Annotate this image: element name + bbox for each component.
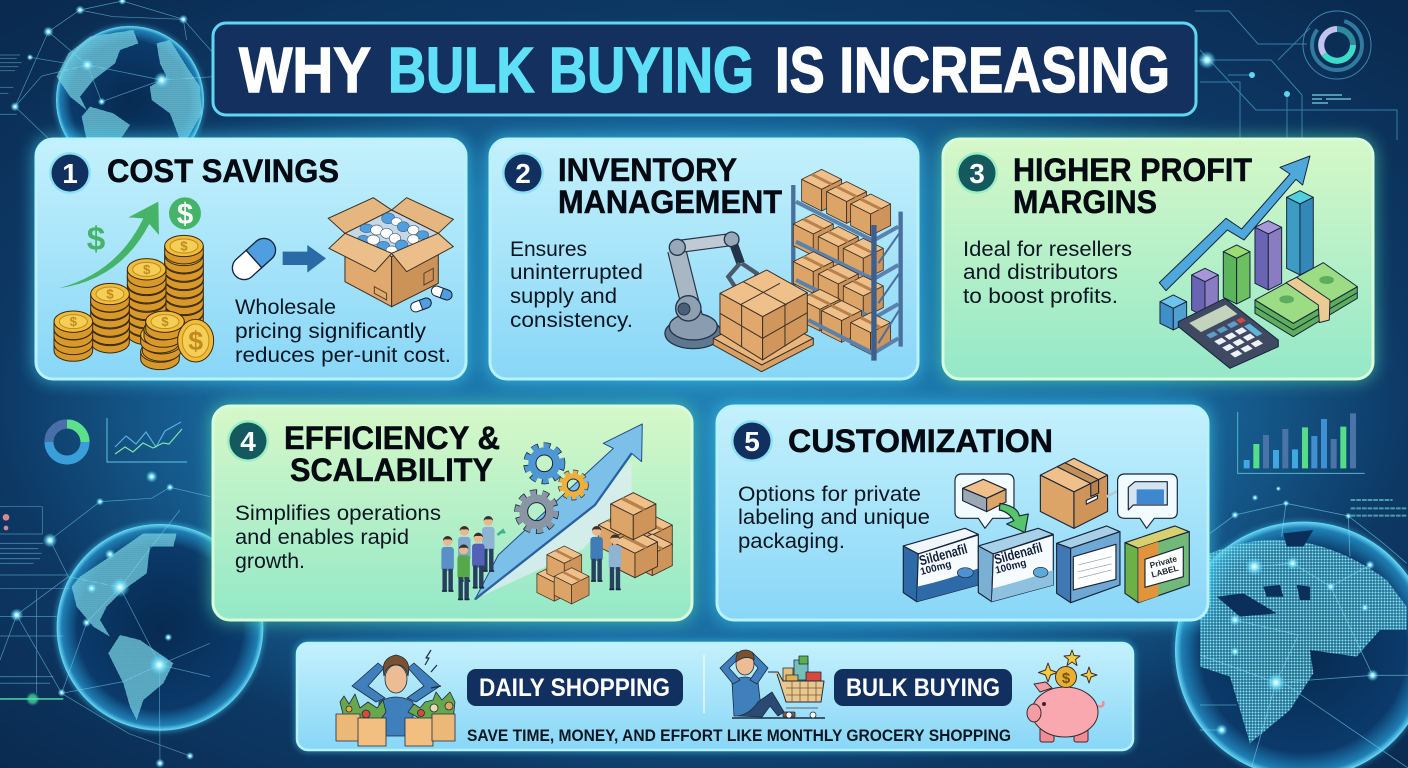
badge 3: 3 (969, 158, 985, 189)
illustration: coin stacks and growth arrow: $ (106, 287, 114, 302)
illustration: coin stacks and growth arrow: $ (188, 326, 203, 356)
icon: sildenafil box (903, 528, 978, 602)
icon: calculator (1178, 298, 1278, 368)
chart: rising bars, arrow, calculator, cash (1159, 156, 1357, 368)
heading: efficiency and scalability (284, 420, 500, 488)
label: daily shopping (467, 669, 683, 706)
heading: efficiency and scalability: SCALABILITY (290, 452, 493, 488)
icon: private label box: LABEL (1150, 563, 1180, 580)
icon: cash bundle (1255, 263, 1357, 337)
body text: customization: labeling and unique (738, 506, 930, 529)
body text: efficiency and scalability: growth. (235, 550, 305, 573)
badge 3 (956, 152, 998, 194)
heading: efficiency and scalability: EFFICIENCY & (284, 420, 500, 456)
body text: inventory management: consistency. (510, 309, 633, 332)
panel 3: higher profit margins (940, 136, 1376, 382)
body text: customization (738, 483, 930, 553)
badge 4: 4 (240, 426, 256, 457)
icon: shipping carton (1040, 458, 1108, 528)
label: bulk buying: BULK BUYING (846, 674, 1000, 702)
icon: sildenafil box: Sildenafil (917, 540, 969, 569)
background globe: bottom left (0, 471, 265, 768)
badge 4 (227, 420, 269, 462)
icon: sildenafil light box: Sildenafil (992, 539, 1044, 567)
background globe: bottom right (1174, 486, 1408, 768)
illustration: coin stacks and growth arrow: $ (70, 314, 78, 329)
badge 5 (731, 420, 773, 462)
body text: customization: Options for private (738, 483, 921, 506)
heading: customization: CUSTOMIZATION (788, 423, 1053, 459)
background chart: donut and line chart (49, 418, 187, 462)
background globe: top left (0, 0, 213, 175)
icon: robot arm (665, 232, 757, 349)
body text: inventory management: uninterrupted (510, 261, 643, 284)
heading: higher profit margins: MARGINS (1013, 184, 1157, 220)
icon: sildenafil box: 100mg (919, 559, 953, 578)
callout: parcel to box (955, 474, 1014, 528)
illustration: coin stacks and growth arrow: $ (143, 262, 151, 277)
badge 1: 1 (62, 158, 78, 189)
body text: inventory management: Ensures (510, 238, 587, 261)
body text: higher profit margins: Ideal for resellers (963, 238, 1132, 261)
badge 2 (502, 152, 544, 194)
illustration: growth arrow, gears, team, cartons (441, 424, 672, 604)
badge 5: 5 (744, 426, 760, 457)
body text: inventory management: supply and (510, 285, 617, 308)
heading: inventory management: MANAGEMENT (558, 184, 782, 220)
icon: capsule, arrow, box of pills (228, 198, 453, 313)
badge 1 (49, 152, 91, 194)
caption: SAVE TIME, MONEY, AND EFFORT LIKE MONTHLY GROCERY SHOPPING (467, 726, 1011, 745)
icon: private label box (1125, 526, 1189, 603)
body text: cost savings: Wholesale (235, 296, 336, 319)
body text: higher profit margins: to boost profits. (963, 285, 1118, 308)
body text: higher profit margins: and distributors (963, 261, 1118, 284)
badge 2: 2 (515, 158, 531, 189)
icon: private label box: Private (1149, 553, 1178, 570)
illustration: coin stacks and growth arrow: $ (87, 221, 106, 258)
body text: efficiency and scalability: Simplifies operations (235, 502, 441, 525)
heading: higher profit margins (1013, 152, 1252, 220)
title text: BULK BUYING (388, 34, 754, 106)
bottom banner: daily shopping vs bulk buying (294, 640, 1136, 753)
heading: inventory management (558, 152, 782, 220)
title text: WHY (239, 34, 371, 106)
icon: blank label box (1057, 526, 1120, 603)
illustration: coin stacks and growth arrow: $ (180, 239, 188, 254)
heading: cost savings: COST SAVINGS (107, 153, 339, 189)
illustration: packaging options (903, 458, 1189, 603)
panel 5: customization (714, 403, 1211, 623)
icon: carton stacks (537, 493, 672, 604)
icon: stressed shopper with grocery bags (336, 650, 455, 746)
panel 1: cost savings (33, 136, 469, 382)
label: bulk buying (834, 669, 1012, 706)
illustration: warehouse shelves with cartons (665, 169, 901, 372)
body text: cost savings: pricing significantly (235, 320, 427, 343)
body text: efficiency and scalability (235, 502, 441, 573)
callout: label design (1118, 474, 1177, 528)
body text: efficiency and scalability: and enables rapid (235, 526, 409, 549)
body text: customization: packaging. (738, 530, 845, 553)
icon: relaxed shopper with cart (720, 650, 825, 718)
icon: gears (521, 448, 584, 528)
background circuit lines and ring gauge: top right (1195, 11, 1397, 140)
illustration: coin stacks and growth arrow: $ (161, 314, 169, 329)
title text: IS INCREASING (775, 34, 1170, 106)
heading: inventory management: INVENTORY (558, 152, 737, 188)
panel 2: inventory management (487, 136, 921, 382)
background bar chart (1238, 412, 1365, 473)
icon: team of people (441, 516, 495, 600)
panel 4: efficiency and scalability (210, 403, 695, 623)
label: daily shopping: DAILY SHOPPING (479, 674, 670, 702)
heading: higher profit margins: HIGHER PROFIT (1013, 152, 1252, 188)
icon: piggy bank with coin and stars: $ (1062, 670, 1071, 687)
title banner (213, 23, 1196, 115)
icon: piggy bank with coin and stars (1027, 650, 1103, 742)
icon: sildenafil light box (978, 528, 1053, 602)
icon: sildenafil light box: 100mg (994, 558, 1028, 577)
icon: pallet of cartons (713, 270, 813, 372)
body text: cost savings: reduces per-unit cost. (235, 344, 451, 367)
body text: inventory management (510, 238, 643, 332)
body text: cost savings (235, 296, 451, 367)
illustration: coin stacks and growth arrow (54, 197, 214, 370)
body text: higher profit margins (963, 238, 1132, 308)
illustration: coin stacks and growth arrow: $ (177, 198, 193, 231)
